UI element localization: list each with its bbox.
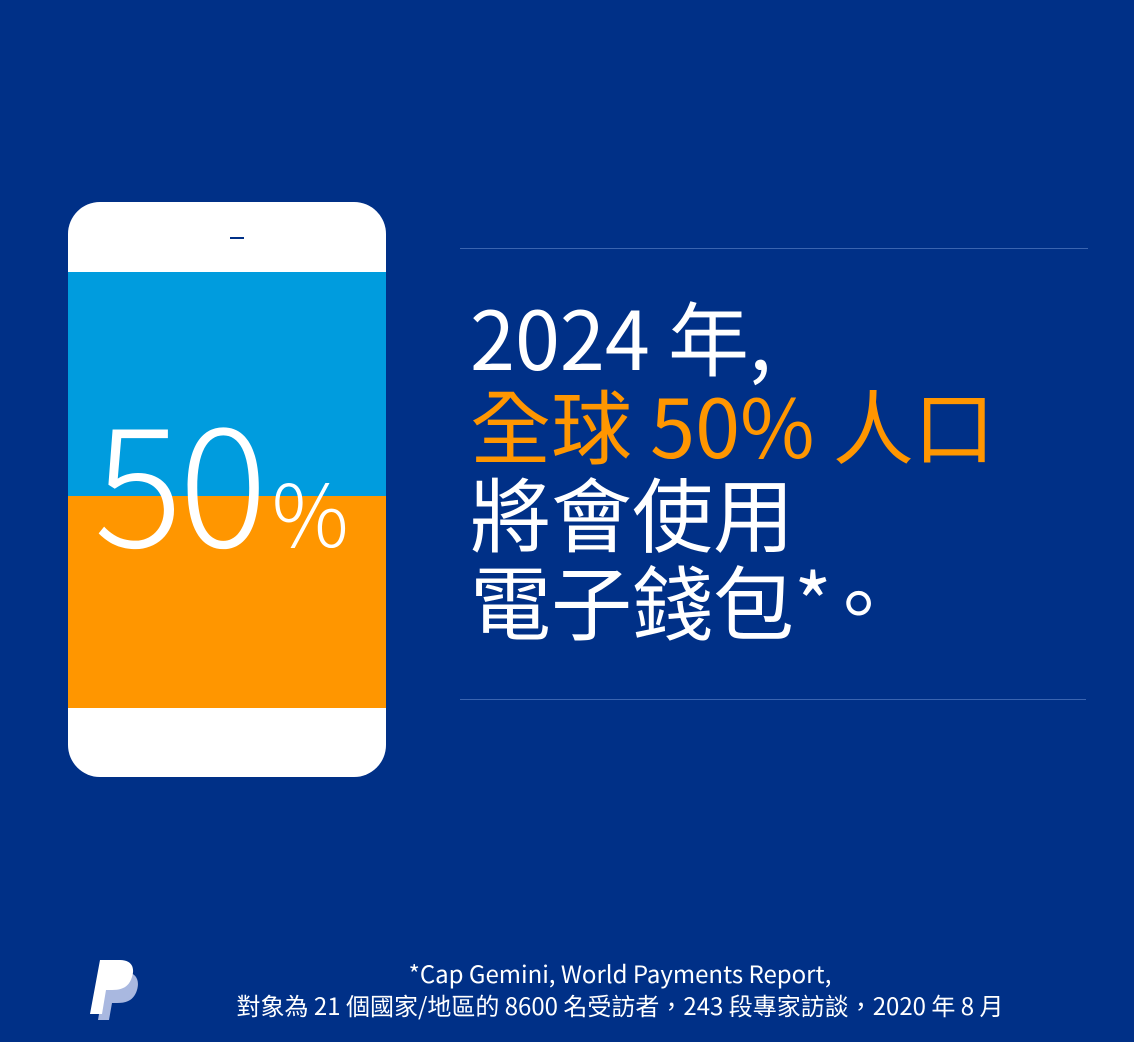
footnote: *Cap Gemini, World Payments Report,: [409, 955, 831, 990]
footnote: 對象為 21 個國家/地區的 8600 名受訪者，243 段專家訪談，2020 年 8 月: [237, 987, 1003, 1022]
icon: paypal logo: [90, 960, 138, 1020]
orange band: [68, 496, 386, 708]
headline: 將會使用: [470, 453, 794, 570]
divider top: [460, 248, 1088, 249]
divider bottom: [460, 699, 1086, 700]
headline: 全球 50% 人口: [470, 365, 995, 482]
footnote: [237, 955, 1003, 1022]
headline: [470, 277, 995, 658]
icon: speaker dash: [230, 237, 244, 239]
headline: 電子錢包*。: [470, 541, 899, 658]
big number: 50%: [94, 354, 349, 595]
blue band: [68, 272, 386, 496]
headline: 2024 年,: [470, 277, 771, 394]
phone: [68, 202, 386, 777]
